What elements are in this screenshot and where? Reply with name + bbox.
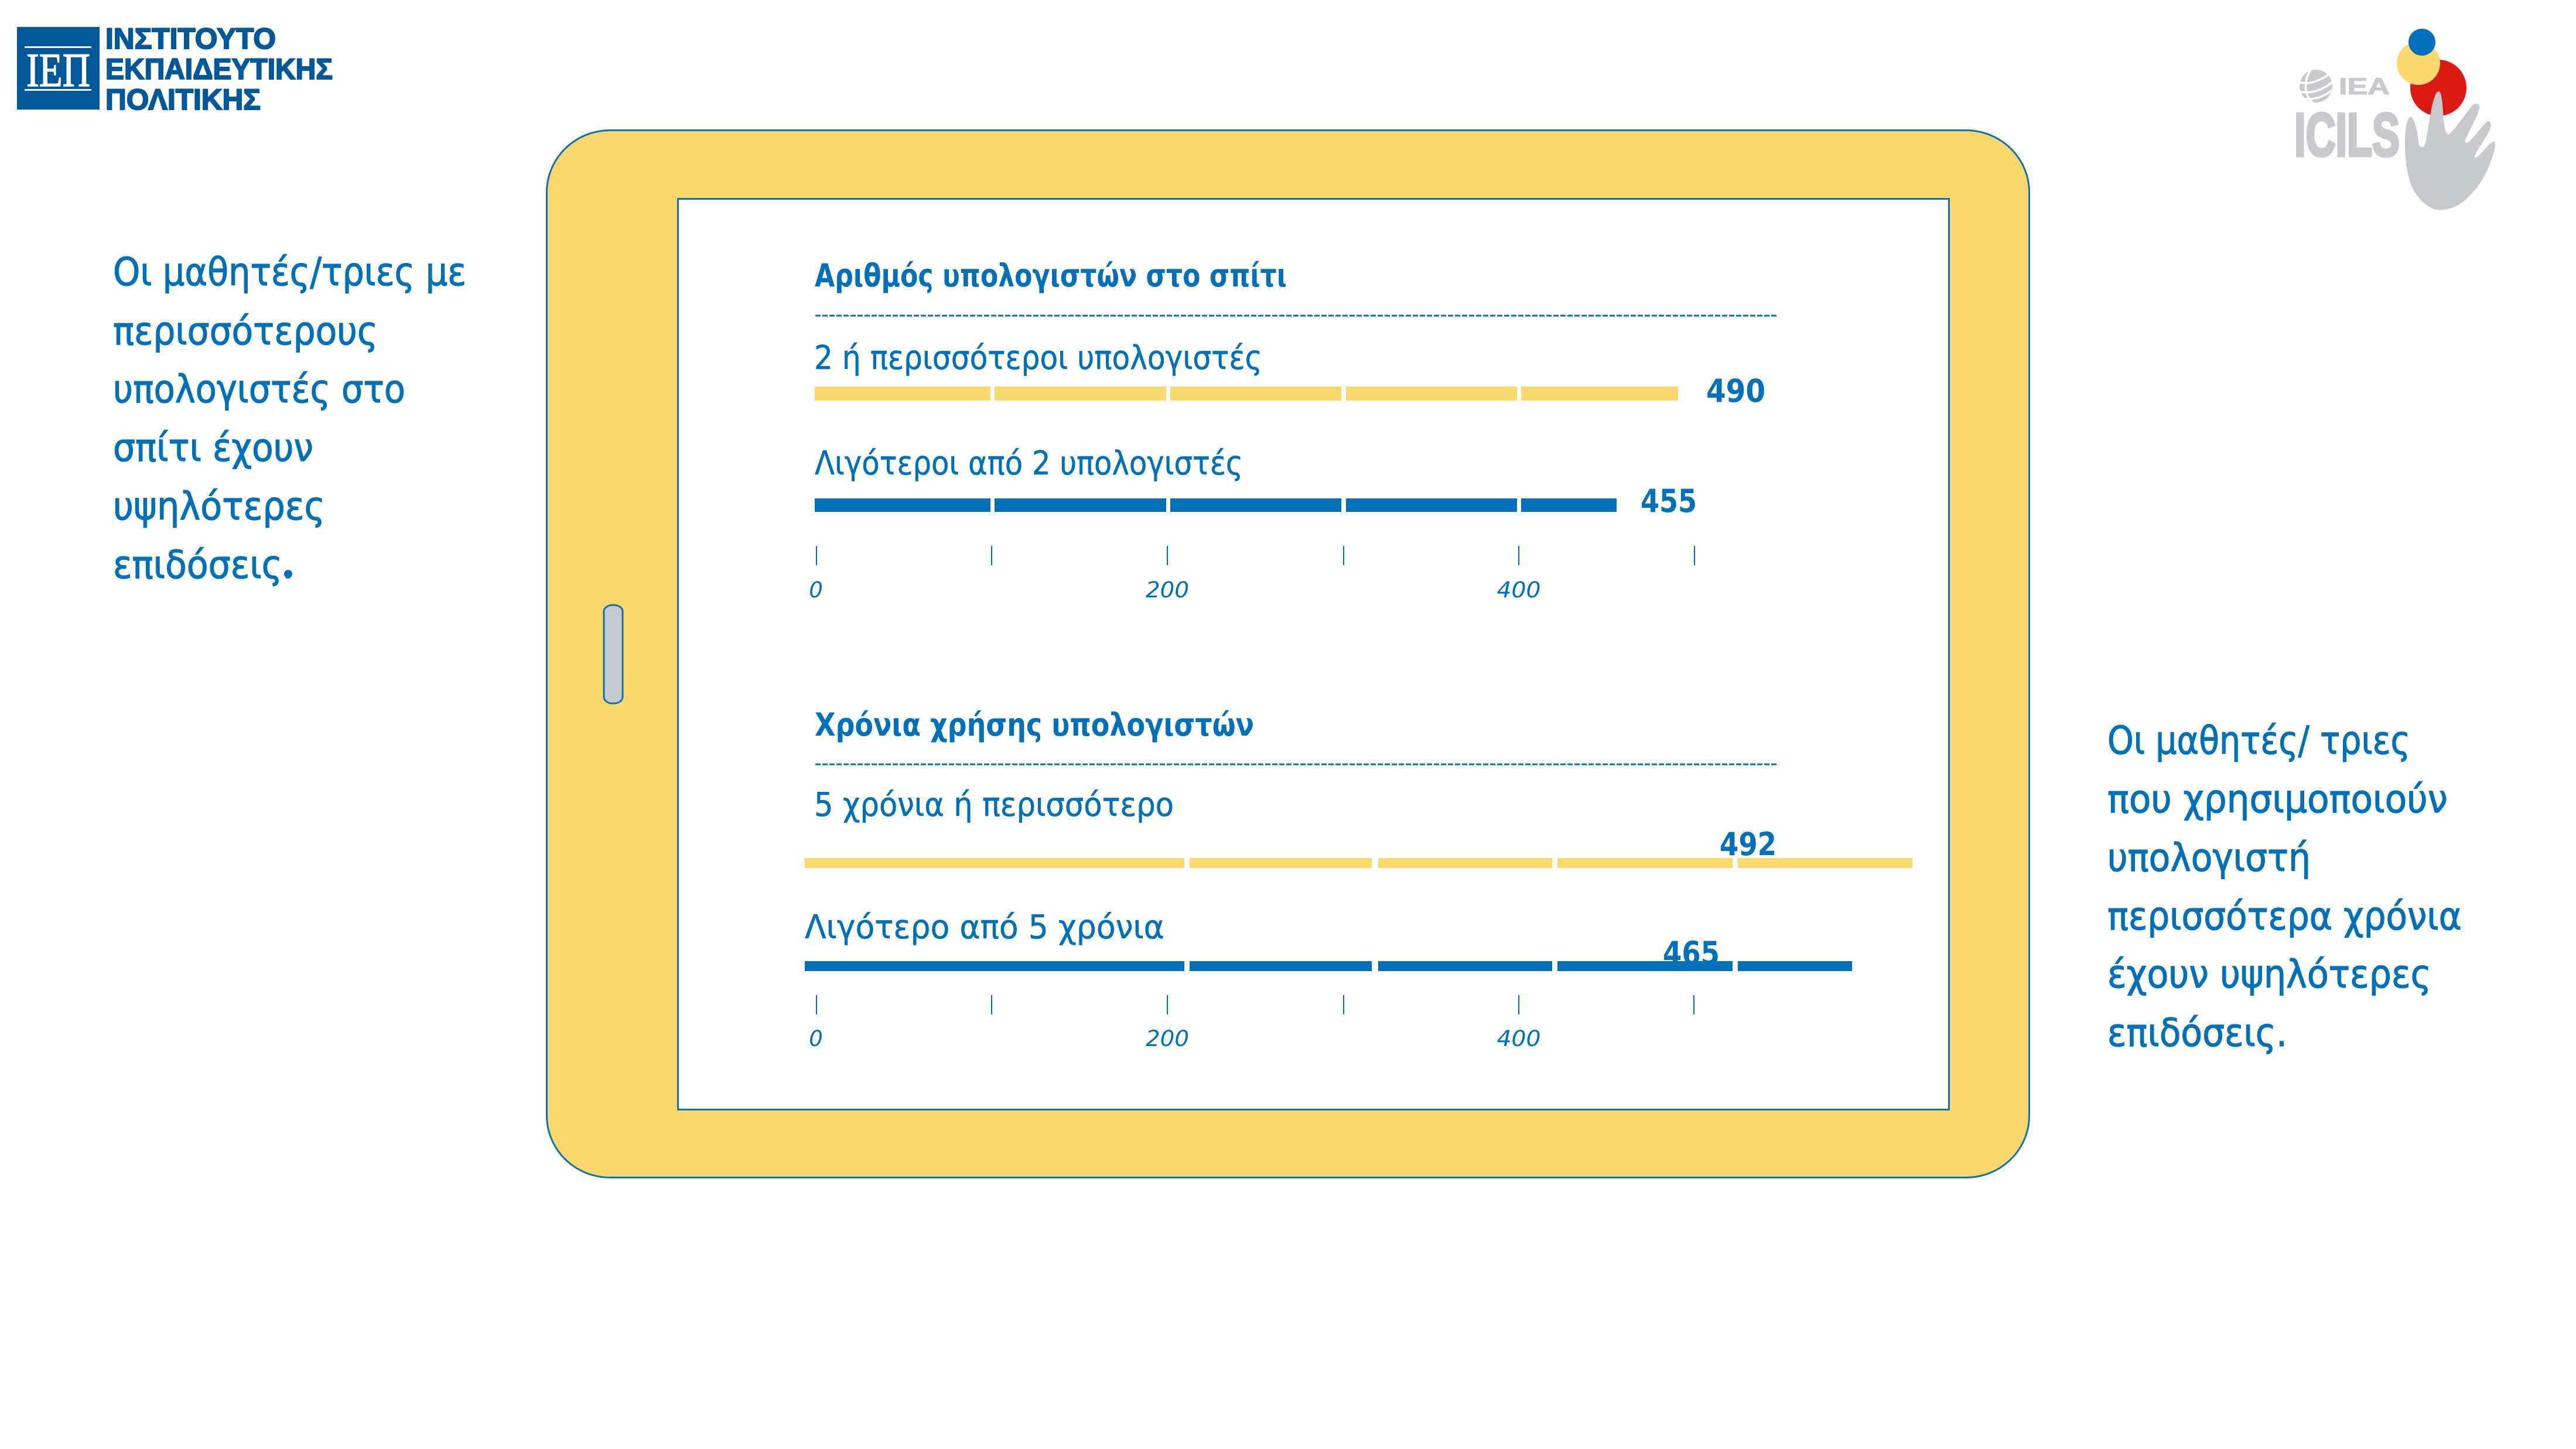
logo wordmark: ΠΟΛΙΤΙΚΗΣ [105,83,261,116]
tablet screen [678,199,1949,1109]
label: fewer than 2 computers: Λιγότεροι από 2 υπολογιστές [815,445,1243,483]
text block: left takeaway: υπολογιστές στο [113,367,405,412]
panel: tablet frame [547,130,2029,1177]
axis: first chart scale: 400 [1497,577,1540,603]
axis: first chart scale: 200 [1146,577,1189,603]
icon: red circle [2410,60,2466,116]
chart: years of computer use [805,706,1912,1051]
chart: number of computers at home [809,257,1777,603]
axis: first chart scale: 0 [809,577,823,603]
logo: IEA ICILS [2294,29,2495,210]
tablet body [547,130,2029,1177]
logo wordmark [105,22,333,116]
axis: first chart scale [809,546,1694,603]
text block: right takeaway: έχουν υψηλότερες [2107,952,2431,997]
logo wordmark: ΕΚΠΑΙΔΕΥΤΙΚΗΣ [105,53,333,86]
bar: 2 or more computers [815,387,1678,401]
text block: left takeaway: σπίτι έχουν [113,425,313,470]
label: less than 5 years: Λιγότερο από 5 χρόνια [805,908,1164,946]
logo wordmark: ΙΝΣΤΙΤΟΥΤΟ [105,22,276,55]
logo: IEP institute [17,22,333,116]
icon: globe [2300,70,2332,102]
value: 490: 490 [1706,372,1765,409]
axis: second chart scale: 400 [1497,1026,1540,1051]
value: 455: 455 [1641,483,1697,520]
heading: number of computers: Αριθμός υπολογιστών στο σπίτι [815,257,1287,294]
text block: left takeaway: περισσότερους [113,309,378,354]
label: 5 years or more: 5 χρόνια ή περισσότερο [814,786,1174,824]
text block: left takeaway: επιδόσεις. [113,542,293,587]
IEA wordmark: IEA [2339,74,2390,100]
text block: left takeaway: Οι μαθητές/τριες με [113,250,466,295]
axis: second chart scale: 200 [1146,1026,1189,1051]
text block: left takeaway: υψηλότερες [113,484,325,529]
text block: right takeaway: υπολογιστή [2107,835,2311,880]
text block: right takeaway: που χρησιμοποιούν [2107,777,2448,822]
heading: years of use: Χρόνια χρήσης υπολογιστών [815,706,1254,743]
axis: second chart scale: 0 [809,1026,823,1051]
logo mark: IEP square [17,27,100,110]
text block: right takeaway: επιδόσεις. [2107,1010,2287,1055]
bar: fewer than 2 computers [815,498,1617,512]
text block: left takeaway [113,250,466,587]
label: 2 or more computers: 2 ή περισσότεροι υπολογιστές [814,339,1262,377]
text block: right takeaway: περισσότερα χρόνια [2107,894,2462,939]
text block: right takeaway: Οι μαθητές/ τριες [2107,718,2410,763]
tablet home button [604,605,623,703]
axis: second chart scale [809,995,1694,1051]
bar: 5 years or more [805,858,1912,868]
value: 492: 492 [1720,826,1776,863]
value: 465: 465 [1663,935,1720,972]
logo mark: IEP square: ΙΕΠ [26,43,90,97]
ICILS wordmark: ICILS [2294,101,2400,169]
icon: yellow circle [2397,42,2440,85]
icon: hand [2405,91,2495,210]
text block: right takeaway [2107,718,2462,1055]
bar: less than 5 years [805,961,1852,971]
icon: blue circle [2408,29,2435,56]
